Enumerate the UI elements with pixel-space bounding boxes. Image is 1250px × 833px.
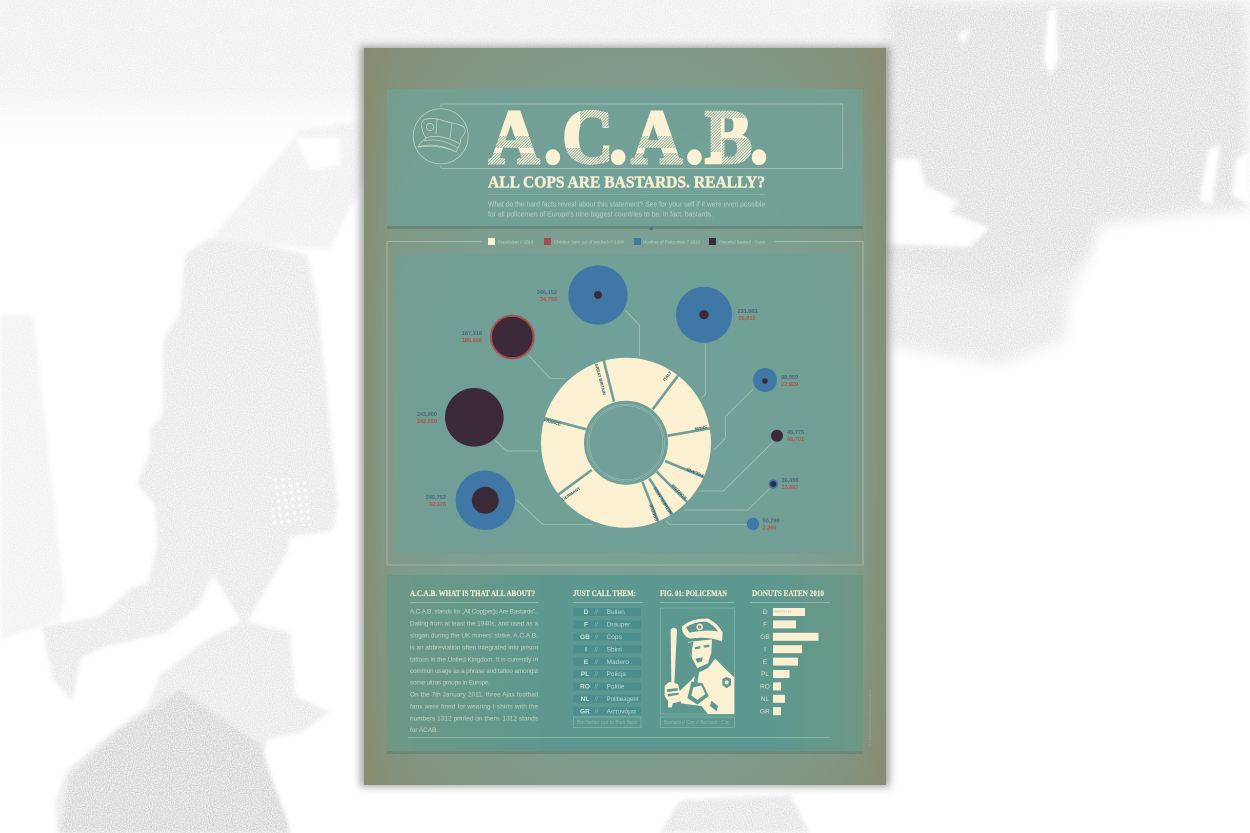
table: just call them: F [584, 622, 588, 629]
table: just call them: Cops [606, 634, 623, 641]
text block: what is ACAB [410, 588, 538, 734]
table: just call them: // [594, 646, 598, 653]
bubble: Netherlands: 50,798 [762, 518, 780, 524]
bar chart: donuts eaten 2010: GR [760, 708, 770, 715]
title: A.C.A.B.: A.C.A.B. [489, 95, 768, 179]
bar chart: donuts eaten 2010 [750, 588, 830, 715]
table: just call them: E [584, 659, 589, 666]
panel: chart frame [387, 242, 863, 565]
legend: potential bastard cops [709, 238, 766, 245]
text block: what is ACAB: fans were fined for wearing t-shirts with the [410, 703, 538, 710]
bubble: Spain [753, 368, 798, 392]
text block: what is ACAB: tattoos in the United Kingdom. It is currently in [410, 656, 538, 663]
text block: what is ACAB: On the 7th January 2011, three Ajax football [410, 691, 538, 698]
icon: police cap in circle [413, 109, 468, 164]
text block: what is ACAB: for ACAB. [410, 727, 438, 734]
table: just call them: Sbirri [606, 646, 622, 653]
table: just call them: Politieagent [606, 696, 639, 703]
leader lines [495, 310, 773, 524]
credit line: A.C.A.B. All Cops Are Bastards infographic [868, 689, 872, 746]
bubble: Netherlands: 2,260 [762, 526, 776, 532]
bar chart: donuts eaten 2010: GB [760, 634, 770, 641]
bubble: Germany [426, 471, 515, 530]
table: just call them: Drauper [606, 622, 631, 629]
bubble: France: 242,020 [417, 419, 437, 425]
table: just call them: I [585, 646, 587, 653]
title hatching overlay [486, 108, 752, 166]
panel: bottom information [387, 575, 872, 754]
bubble: Great Britain: 34,793 [540, 297, 557, 303]
bubble: Poland [771, 430, 804, 443]
bubble: Romania [768, 478, 799, 491]
figure: policeman: FIG. 01: POLICEMAN [660, 588, 727, 598]
bubble: Italy [676, 287, 758, 343]
text block: what is ACAB: A.C.A.B. stands for „All Cop[per]s Are Bastards". [410, 609, 537, 616]
figure: policeman [660, 588, 734, 728]
figure: policeman: Bastard // Cop // Bastard - Cop [664, 720, 730, 726]
bubble: France: 243,900 [417, 412, 437, 418]
segment labels: FRANCE [543, 417, 562, 427]
table: just call them: // [594, 671, 598, 678]
text block: what is ACAB: some ultras groups in Europe. [410, 680, 490, 687]
illustration: policeman with baton [665, 619, 734, 714]
bubble: Romania: 23,097 [782, 485, 799, 491]
table: just call them: Madero [606, 659, 629, 666]
subtitle: ALL COPS ARE BASTARDS. REALLY? [488, 172, 765, 191]
legend: policemen [634, 238, 701, 245]
bar chart: donuts eaten 2010: DONUTS EATEN 2010 [752, 588, 824, 598]
table: just call them: D [584, 609, 589, 616]
bubble: Poland: 48,701 [787, 437, 804, 443]
text block: what is ACAB: is an abbreviation often integrated into prison [410, 644, 538, 651]
segment labels: ROMANIA [670, 483, 688, 500]
table: just call them: // [594, 609, 598, 616]
bar chart: donuts eaten 2010: F [763, 622, 767, 629]
segment labels [543, 363, 707, 522]
table: just call them: PL [581, 671, 589, 678]
bubble: France top [462, 316, 534, 358]
table: just call them: // [594, 708, 598, 715]
text block: what is ACAB: slogan during the UK miners' strike, A.C.A.B. [410, 632, 538, 639]
table: just call them: // [594, 622, 598, 629]
table: just call them: GR [580, 708, 590, 715]
bar chart: donuts eaten 2010: RO [760, 684, 770, 691]
text block: what is ACAB: Dating from at least the 1940s, and used as a [410, 621, 538, 628]
table: just call them: Politie [606, 684, 625, 691]
bar chart: donuts eaten 2010: I [764, 646, 766, 653]
segment labels: GREECE [648, 503, 659, 522]
table: just call them: JUST CALL THEM: [573, 588, 636, 598]
segment labels: POLAND [686, 467, 704, 478]
bubble: Germany: 32,375 [429, 502, 446, 508]
bubble: Netherlands [747, 518, 780, 532]
bubble: Spain: 22,829 [781, 382, 798, 388]
segment labels: SPAIN [694, 424, 707, 432]
bar chart: donuts eaten 2010: NL [761, 696, 770, 703]
table: just call them: NL [581, 696, 589, 703]
segment labels: GREAT BRITAIN [594, 363, 607, 395]
bubble: Romania: 36,496 [782, 478, 799, 484]
text block: what is ACAB: common usage as a phrase and tattoo amongst [410, 668, 538, 675]
intro text: for all policemen of Europe's nine biggest countries to be, in fact, bastards. [488, 210, 713, 219]
intro text: What do the hard facts reveal about this statement? See for your self if it were even possible [488, 200, 765, 209]
table: just call them [573, 588, 643, 728]
legend: population [488, 238, 534, 245]
bubble: France top: 186,666 [462, 338, 482, 344]
segment labels: ITALY [662, 370, 673, 382]
bubble: Italy: 26,012 [738, 316, 756, 322]
table: just call them: But better not to their face [577, 720, 637, 726]
bubble: Spain: 98,959 [781, 375, 798, 381]
bubble: Italy: 231,861 [738, 309, 758, 315]
text block: what is ACAB: numbers 1312 printed on them. 1312 stands [410, 715, 538, 722]
table: just call them: // [594, 696, 598, 703]
bar chart: donuts eaten 2010: D [763, 609, 768, 616]
segment labels: GERMANY [561, 485, 582, 502]
marker pin [650, 227, 653, 230]
table: just call them: RO [580, 684, 590, 691]
text block: what is ACAB: A.C.A.B. WHAT IS THAT ALL ABOUT? [410, 588, 535, 598]
table: just call them: // [594, 684, 598, 691]
legend [488, 238, 766, 245]
legend: policemen: Number of Policemen // 2010 [643, 239, 701, 244]
segment labels: NETHERLANDS [652, 486, 673, 516]
table: just call them: GB [580, 634, 590, 641]
legend: potential bastard cops: Potential Bastard - Cops [719, 239, 766, 244]
bubble: France [417, 388, 504, 447]
bar chart: donuts eaten 2010: E [763, 659, 768, 666]
title frame [441, 104, 843, 168]
bubble: Great Britain [537, 265, 628, 325]
donut chart: population [541, 358, 712, 528]
table: just call them: Αστυνόμα [606, 707, 636, 715]
panel: chart area [397, 254, 852, 553]
legend: population: Population // 2010 [498, 239, 534, 244]
panel: title [387, 89, 863, 230]
bubble: Germany: 245,752 [426, 495, 446, 501]
bubble: Great Britain: 246,152 [537, 290, 557, 296]
table: just call them: Bullen [606, 609, 625, 616]
table: just call them: // [594, 634, 598, 641]
bar chart: donuts eaten 2010: DONUTS // KG [774, 610, 792, 614]
legend: children born out of wedlock: Children born out of wedlock // 1990 [554, 239, 625, 244]
intro text [488, 200, 765, 219]
bar chart: donuts eaten 2010: PL [761, 671, 769, 678]
table: just call them: // [594, 659, 598, 666]
poster [360, 46, 890, 787]
bubble: France top: 167,318 [462, 331, 482, 337]
bubble: Poland: 45,775 [787, 430, 804, 436]
legend: children born out of wedlock [544, 238, 625, 245]
table: just call them: Policja [606, 671, 626, 678]
